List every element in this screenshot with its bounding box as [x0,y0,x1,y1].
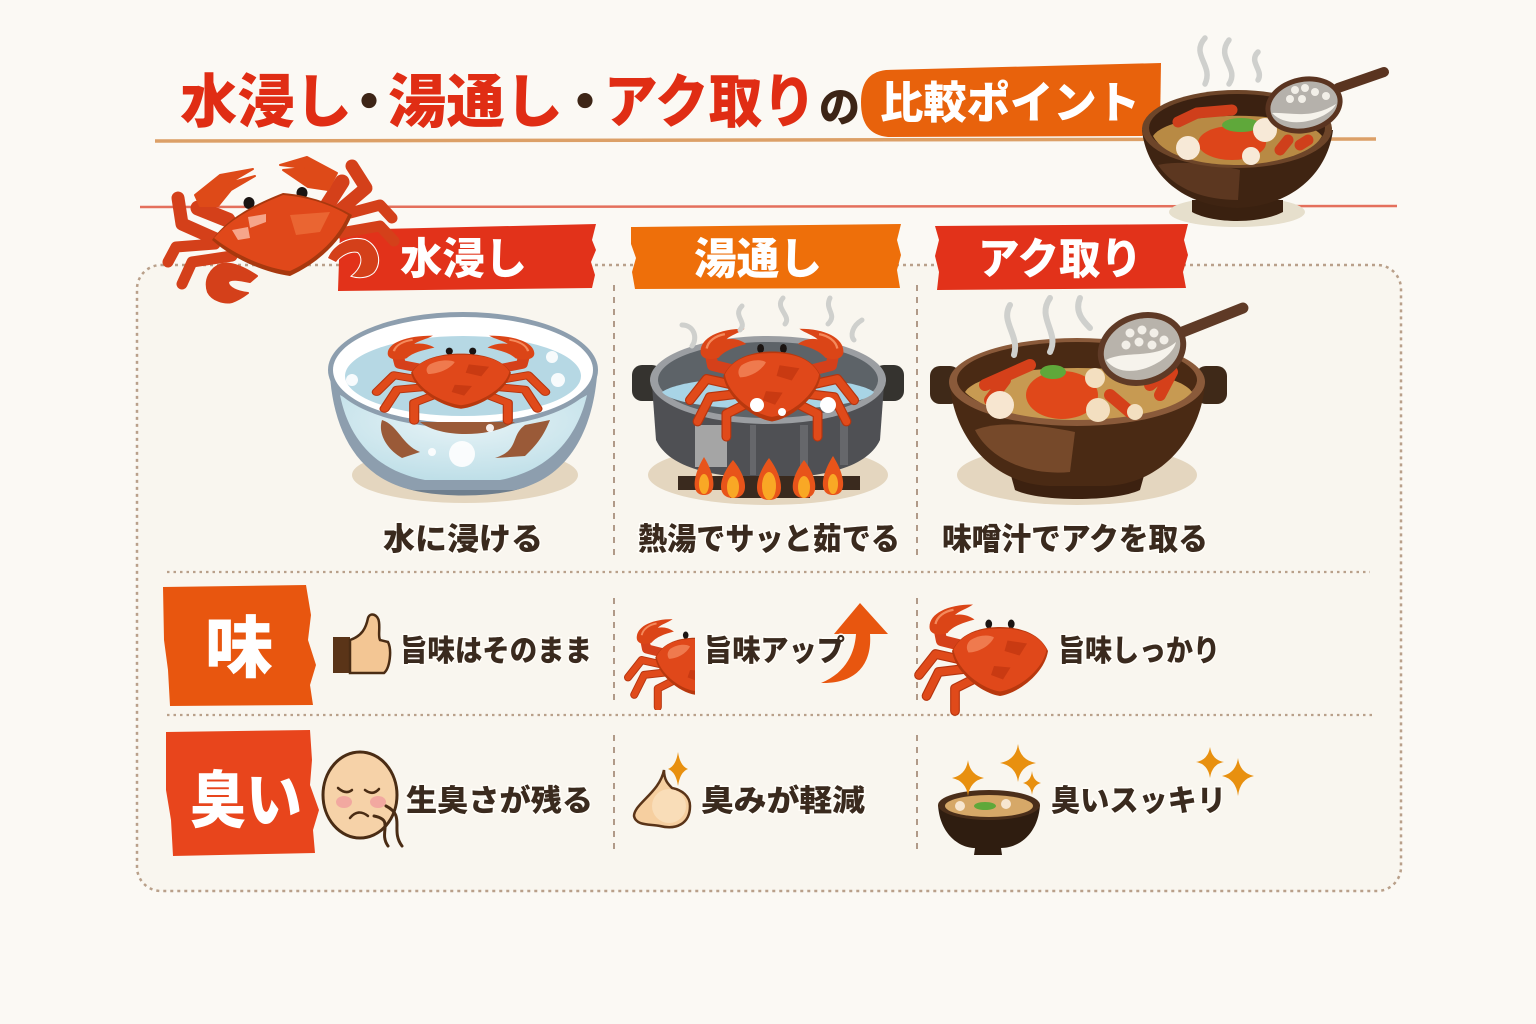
icon: crab side view [919,604,1048,711]
horizontal row dividers [167,572,1372,715]
title [180,70,860,135]
pot handles [632,365,904,401]
main comparison panel [137,265,1401,891]
icon: frowning face [323,752,402,846]
vertical column dividers [614,285,917,855]
header ribbon: blanching [631,224,901,289]
icon: miso bowl with sparkles [938,744,1254,855]
smell: raw smell remains: 生臭さが残る [406,784,593,818]
illustration: top-right miso bowl [1142,38,1384,227]
left pincer [195,169,255,206]
title: アク取り [604,70,816,135]
header ribbon: scum removal: アク取り [978,236,1142,284]
taste: thumbs up icon [333,615,390,673]
lower-right claw [328,239,378,277]
header ribbon: water soak: 水浸し [400,236,527,284]
caption: soak in water: 水に浸ける [383,522,543,557]
title underline [155,139,1376,141]
title pill: comparison points: 比較ポイント [880,78,1140,128]
ladle [1260,70,1384,140]
row label: smell [166,730,319,856]
title: ・ [342,73,396,133]
row label: smell: 臭い [190,767,302,836]
flames [695,456,843,500]
smell: refreshed: 臭いスッキリ [1051,785,1226,818]
smell: reduced: 臭みが軽減 [701,784,865,818]
icon: half crab [624,619,695,710]
taste: firm flavor: 旨味しっかり [1058,635,1220,668]
icon: nose with sparkle [634,752,690,827]
steam [1200,38,1259,84]
pot foot [1010,472,1145,499]
eyes [244,187,308,209]
illustration: steel pot boiling over flames [632,298,904,505]
icon: up arrow [821,603,888,683]
lower-left claw [207,264,257,303]
pot handles [930,366,1227,404]
steam [1007,298,1090,355]
steam [682,298,862,346]
title: ・ [558,73,612,133]
shell [212,193,352,276]
burner [678,476,860,498]
ladle [1088,301,1243,397]
header ribbon: water soak [338,224,596,291]
submerged crab reflection [381,420,550,458]
title pill: comparison points [861,63,1161,137]
row label: taste [163,585,316,706]
illustration: glass bowl with crab in water [328,312,598,503]
taste: flavor up: 旨味アップ [704,635,845,668]
taste: keeps flavor: 旨味はそのまま [400,635,592,668]
header ribbon: blanching: 湯通し [694,236,822,284]
icon: large red crab [168,157,394,303]
caption: remove scum with miso: 味噌汁でアクを取る [942,522,1208,557]
title: の [819,84,860,131]
right pincer [280,157,337,190]
row label: taste: 味 [205,611,273,687]
header ribbon: scum removal [935,224,1188,290]
illustration: clay pot of miso with ladle [930,298,1243,505]
caption: quick boil: 熱湯でサッと茹でる [638,522,900,557]
title: 湯通し [388,70,563,135]
red rule [140,206,1397,207]
title: 水浸し [180,70,352,135]
